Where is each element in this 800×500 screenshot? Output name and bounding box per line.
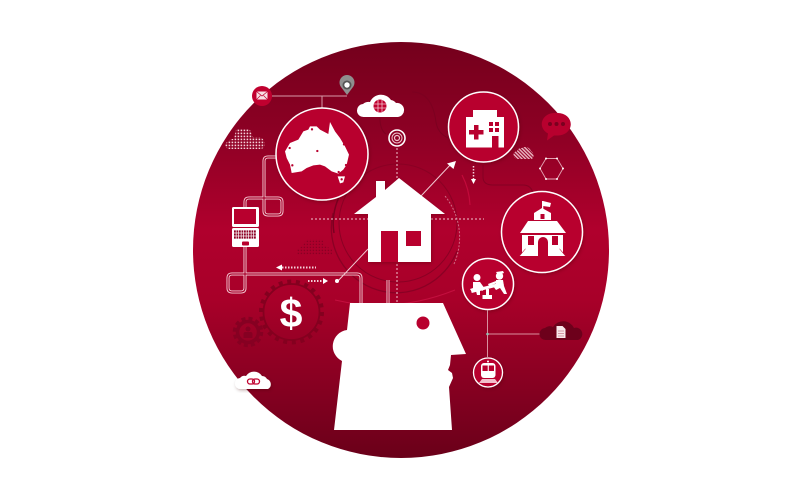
icon: target: [389, 130, 405, 146]
dot pattern cloud: [225, 128, 265, 149]
dot: pointer end: [335, 279, 339, 283]
panel: playground seesaw circle: [462, 258, 514, 310]
icon: padlock gear: [234, 318, 262, 346]
connector tubes left: [228, 157, 388, 303]
map: Australia: [285, 122, 349, 183]
arrow: rightward: [323, 278, 328, 284]
icon: document cloud: [539, 321, 582, 340]
icon: link cloud: [235, 372, 271, 389]
concentric rings behind house: [331, 92, 533, 305]
dollar sign: $: [280, 290, 303, 336]
icon: human head silhouette: [333, 303, 466, 430]
icon: laptop: [232, 207, 259, 247]
icon: school building: [518, 201, 567, 257]
arrow: leftward: [276, 264, 282, 270]
icon: dollar gear: [261, 282, 322, 342]
icon: train: [479, 360, 498, 383]
background circle: [193, 42, 609, 458]
icon: hexagon network: [539, 158, 564, 180]
network lines right: [488, 310, 540, 357]
head eye: [416, 316, 430, 330]
arrow: down from hospital: [471, 179, 476, 184]
icon: striped cloud: [513, 147, 534, 159]
icon: envelope badge: [252, 86, 272, 106]
dashed axis lines: [311, 148, 484, 303]
panel: hospital circle: [448, 92, 518, 162]
node dot: [486, 333, 489, 335]
arrows and pointers: [337, 163, 452, 282]
arrow: up right to hospital: [447, 161, 456, 169]
panel: school circle: [502, 192, 582, 272]
icon: house: [354, 178, 445, 262]
icon: speech bubble: [542, 113, 571, 140]
house door: [381, 231, 398, 262]
panel: Australia map circle: [276, 108, 368, 200]
house window: [406, 231, 421, 246]
panel: train circle: [474, 358, 502, 387]
network lines top: [272, 96, 347, 109]
icon: location pin: [340, 75, 355, 95]
icon: hospital building: [466, 110, 504, 148]
icon: children on seesaw: [470, 271, 507, 299]
icon: globe cloud: [357, 95, 404, 117]
dot pattern mid left: [297, 239, 332, 255]
